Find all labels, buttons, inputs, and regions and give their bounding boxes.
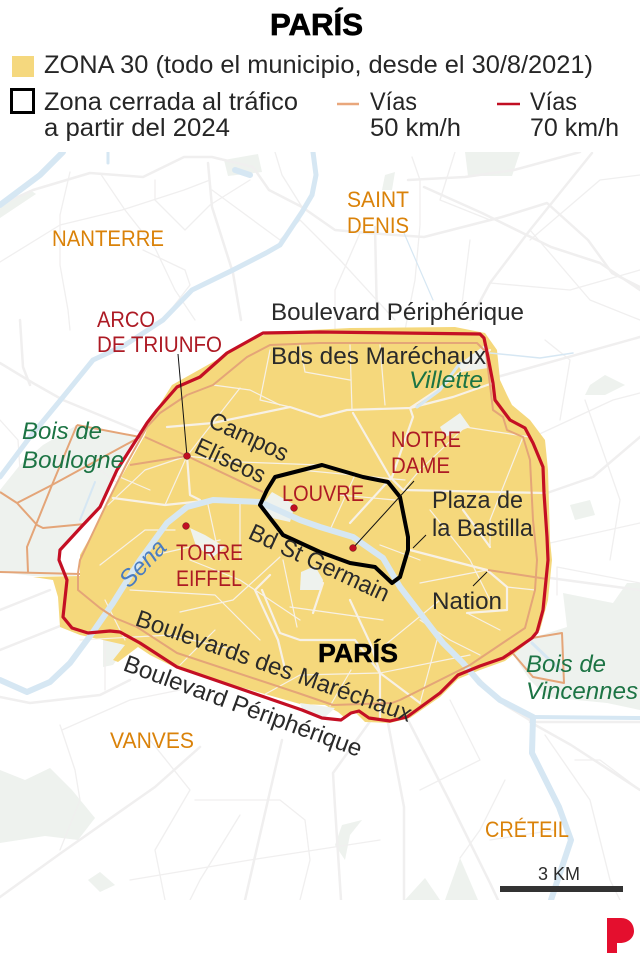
legend label: zona 30: ZONA 30 (todo el municipio, desde el 30/8/2021)	[44, 51, 593, 79]
suburb label: Saint Denis: SAINT	[347, 187, 409, 212]
rivers	[0, 152, 640, 900]
suburb label: Créteil: CRÉTEIL	[485, 817, 569, 842]
legend value: 50 km/h: 50 km/h	[370, 114, 461, 142]
logo: publisher mark	[607, 918, 634, 953]
road label: Boulevard Périphérique south: Boulevard Périphérique	[120, 650, 366, 763]
roads: Arc de Triomphe	[130, 437, 263, 492]
legend label: closed zone: Zona cerrada al tráfico	[44, 88, 298, 116]
place label: Nation: Nation	[432, 588, 502, 615]
canal: Ourcq	[417, 363, 460, 407]
canals	[490, 353, 573, 358]
river label: Sena: Sena	[114, 534, 172, 593]
orange avenue lines 50 km/h	[0, 343, 564, 705]
monument dots	[183, 453, 356, 551]
monument label: Notre Dame: NOTRE	[391, 427, 461, 452]
legend	[12, 51, 619, 142]
river: Marne	[533, 717, 640, 718]
park label: Bois de Vincennes: Vincennes	[526, 678, 638, 705]
monument label: Notre Dame: DAME	[391, 453, 450, 478]
street label: Campos Elíseos: Campos	[204, 407, 293, 467]
street label: Campos Elíseos	[194, 414, 288, 482]
river: Seine through Paris	[0, 500, 571, 900]
legend swatch: zona 30	[12, 56, 34, 77]
street label: Bd St Germain: Bd St Germain	[244, 519, 394, 608]
canal: Saint-Denis	[404, 233, 433, 300]
road: Nation	[488, 570, 547, 579]
monument label: Arco de Triunfo: DE TRIUNFO	[97, 332, 222, 357]
yellow zone 30 area	[33, 327, 552, 723]
river: Seine north loop	[0, 152, 63, 205]
parks	[0, 152, 640, 900]
leader lines	[178, 354, 487, 586]
monument label: Torre Eiffel: TORRE	[176, 540, 243, 565]
monument label: Arco de Triunfo	[97, 312, 221, 352]
lake Boulogne	[80, 482, 95, 520]
inner parks	[190, 345, 488, 717]
park label: Bois de Vincennes	[526, 651, 638, 705]
red periphérique 70 km/h	[59, 332, 548, 721]
legend swatch: 70 km/h	[497, 103, 520, 105]
park label: Bois de Boulogne: Boulogne	[22, 447, 124, 474]
road label: Boulevard Périphérique north: Boulevard Périphérique	[271, 299, 524, 326]
legend label: 50: Vías	[370, 88, 417, 116]
black closed zone outline	[260, 465, 408, 583]
city label: París: PARÍS	[318, 638, 398, 668]
scale bar	[500, 864, 623, 892]
scale bar: 3 KM	[538, 864, 580, 884]
park label: Bois de Boulogne	[22, 418, 124, 474]
roads: Bois de Vincennes	[510, 633, 564, 683]
suburb label: Vanves: VANVES	[110, 728, 194, 753]
legend swatch: 50 km/h	[337, 103, 359, 105]
place label: Plaza de la Bastilla: Plaza de	[432, 487, 523, 514]
map	[0, 152, 640, 900]
white inner roads	[80, 345, 545, 717]
monument label: Arco de Triunfo: ARCO	[97, 307, 155, 332]
monument label: Torre Eiffel	[176, 540, 243, 591]
river: Seine west	[0, 152, 316, 477]
place label: Plaza de la Bastilla: la Bastilla	[432, 515, 534, 542]
road label: Boulevards des Maréchaux: Boulevards des Maréchaux	[132, 605, 415, 728]
roads: Bois de Boulogne	[0, 425, 140, 574]
legend label: closed zone line 2: a partir del 2024	[44, 114, 230, 142]
place label: Plaza de la Bastilla	[434, 490, 533, 536]
legend swatch: closed zone	[12, 90, 34, 112]
monument label: Torre Eiffel: EIFFEL	[176, 566, 242, 591]
park label: Villette: Villette	[409, 367, 483, 394]
monument label: Louvre: LOUVRE	[282, 481, 364, 506]
street label: Campos Elíseos: Elíseos	[190, 433, 270, 489]
suburb label: Nanterre: NANTERRE	[52, 226, 164, 251]
ring: Boulevards des Maréchaux	[78, 343, 537, 705]
lake	[235, 170, 250, 175]
park label: Bois de Vincennes: Bois de	[526, 651, 606, 678]
lake Vincennes	[532, 643, 560, 670]
monument label: Notre Dame	[392, 432, 460, 473]
suburb label: Saint Denis	[348, 192, 408, 233]
legend label: 70: Vías	[530, 88, 577, 116]
park label: Bois de Boulogne: Bois de	[22, 418, 102, 445]
title: PARÍS	[270, 7, 363, 42]
suburb label: Saint Denis: DENIS	[347, 213, 409, 238]
road label: Bds des Maréchaux: Bds des Maréchaux	[271, 343, 486, 370]
legend value: 70 km/h: 70 km/h	[530, 114, 619, 142]
outer roads	[0, 152, 640, 900]
